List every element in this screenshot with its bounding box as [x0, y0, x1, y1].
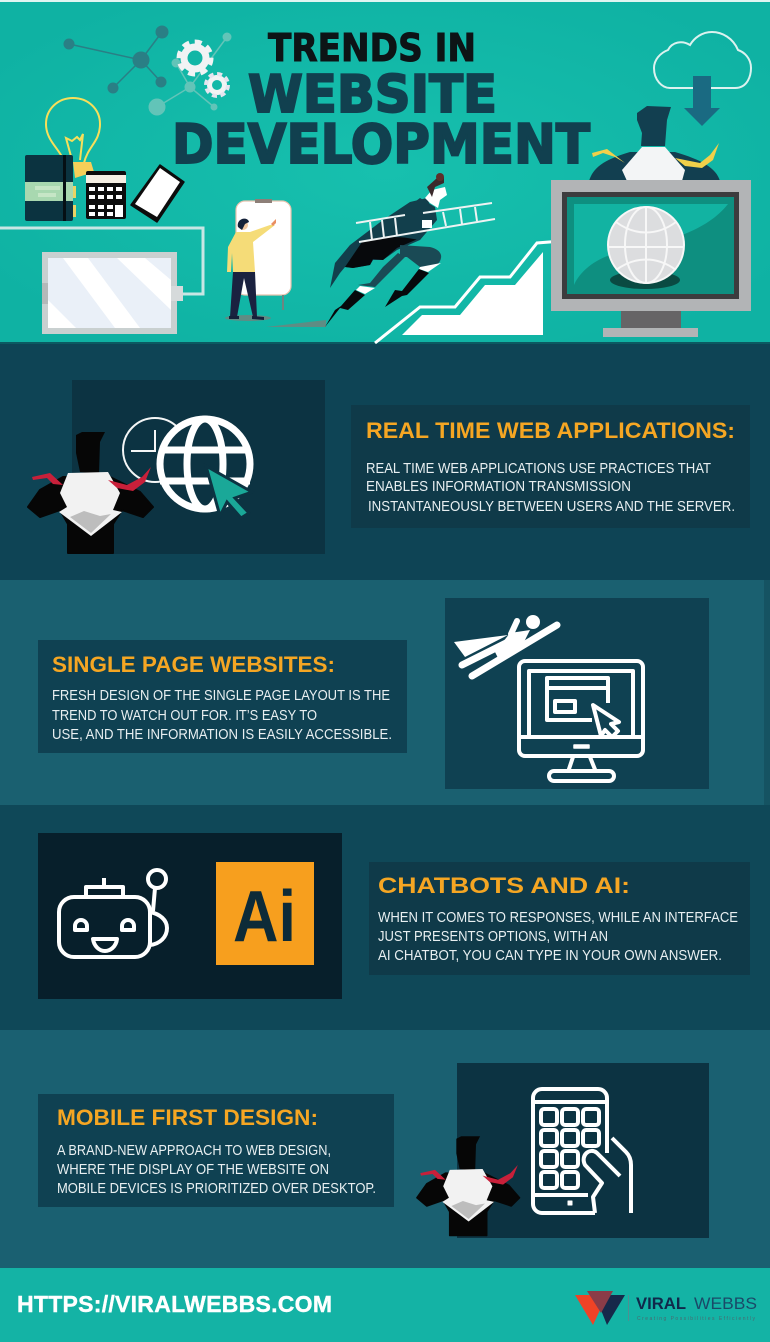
icon: clock	[123, 418, 187, 482]
body text: JUST PRESENTS OPTIONS, WITH AN	[378, 928, 608, 945]
title: TRENDS IN	[268, 26, 476, 70]
logo: Viral Webbs: VIRAL	[636, 1294, 686, 1313]
heading: REAL TIME WEB APPLICATIONS:	[366, 418, 735, 443]
panel: real time image	[72, 380, 325, 554]
icon: light bulb	[46, 98, 100, 178]
title	[172, 26, 590, 176]
icon: light network	[149, 33, 231, 115]
icon: calculator	[86, 171, 126, 219]
body text	[378, 909, 738, 964]
illustration: man above monitor	[589, 106, 720, 181]
icon: globe	[160, 419, 250, 509]
body text	[57, 1142, 376, 1197]
heading: SINGLE PAGE WEBSITES:	[52, 652, 335, 677]
body text: REAL TIME WEB APPLICATIONS USE PRACTICES THAT	[366, 460, 711, 477]
logo: Viral Webbs: WEBBS	[694, 1294, 757, 1313]
body text	[366, 460, 735, 515]
body text: MOBILE DEVICES IS PRIORITIZED OVER DESKTOP.	[57, 1180, 376, 1197]
icon: dark network	[64, 26, 168, 93]
icon: robot	[59, 870, 167, 957]
body text	[52, 687, 392, 743]
logo: Viral Webbs	[575, 1291, 757, 1325]
website url: HTTPS://VIRALWEBBS.COM	[17, 1291, 332, 1317]
title: DEVELOPMENT	[172, 113, 590, 176]
icon: superhero left	[28, 432, 153, 553]
illustration: growth chart	[375, 241, 562, 343]
icon: teal cursor	[206, 466, 252, 518]
icon: monitor with window	[519, 661, 643, 781]
icon: Ai badge	[216, 862, 314, 965]
illustration: desktop monitor with globe	[551, 180, 751, 337]
panel: real time text	[351, 405, 750, 528]
body text: A BRAND-NEW APPROACH TO WEB DESIGN,	[57, 1142, 331, 1159]
body text: ENABLES INFORMATION TRANSMISSION	[366, 478, 631, 495]
heading: MOBILE FIRST DESIGN:	[57, 1105, 318, 1130]
illustration: whiteboard with person	[225, 199, 291, 321]
panel: chatbot text	[369, 862, 750, 975]
footer	[0, 1268, 770, 1342]
icon: superhero right	[417, 1136, 519, 1235]
icon: tablet	[131, 165, 184, 222]
icon: cloud download	[654, 32, 751, 126]
body text: AI CHATBOT, YOU CAN TYPE IN YOUR OWN ANSWER.	[378, 947, 722, 964]
panel: single page text	[38, 640, 407, 753]
icon: flying hero	[454, 615, 557, 676]
panel: mobile first image	[457, 1063, 709, 1238]
panel: single page image	[445, 598, 709, 789]
shadow of runner	[266, 320, 326, 327]
illustration: runner with ladder	[325, 173, 495, 327]
panel: chatbot image	[38, 833, 342, 999]
icon: phone in hand	[533, 1089, 631, 1213]
logo: Viral Webbs: Creating Possibilities Efficiently	[637, 1316, 756, 1322]
icon: Ai badge: Ai	[233, 877, 296, 957]
heading: CHATBOTS AND AI:	[378, 873, 630, 898]
body text: FRESH DESIGN OF THE SINGLE PAGE LAYOUT IS THE	[52, 687, 390, 704]
panel: mobile first text	[38, 1094, 394, 1207]
panel: hero banner	[0, 0, 770, 344]
icon: cable	[0, 228, 203, 294]
title: WEBSITE	[248, 65, 497, 125]
body text: TREND TO WATCH OUT FOR. IT’S EASY TO	[52, 707, 317, 724]
body text: USE, AND THE INFORMATION IS EASILY ACCESSIBLE.	[52, 726, 392, 743]
icon: gears	[179, 42, 228, 96]
icon: glass device	[42, 252, 183, 334]
body text: WHERE THE DISPLAY OF THE WEBSITE ON	[57, 1161, 329, 1178]
icon: notebook	[25, 155, 76, 221]
